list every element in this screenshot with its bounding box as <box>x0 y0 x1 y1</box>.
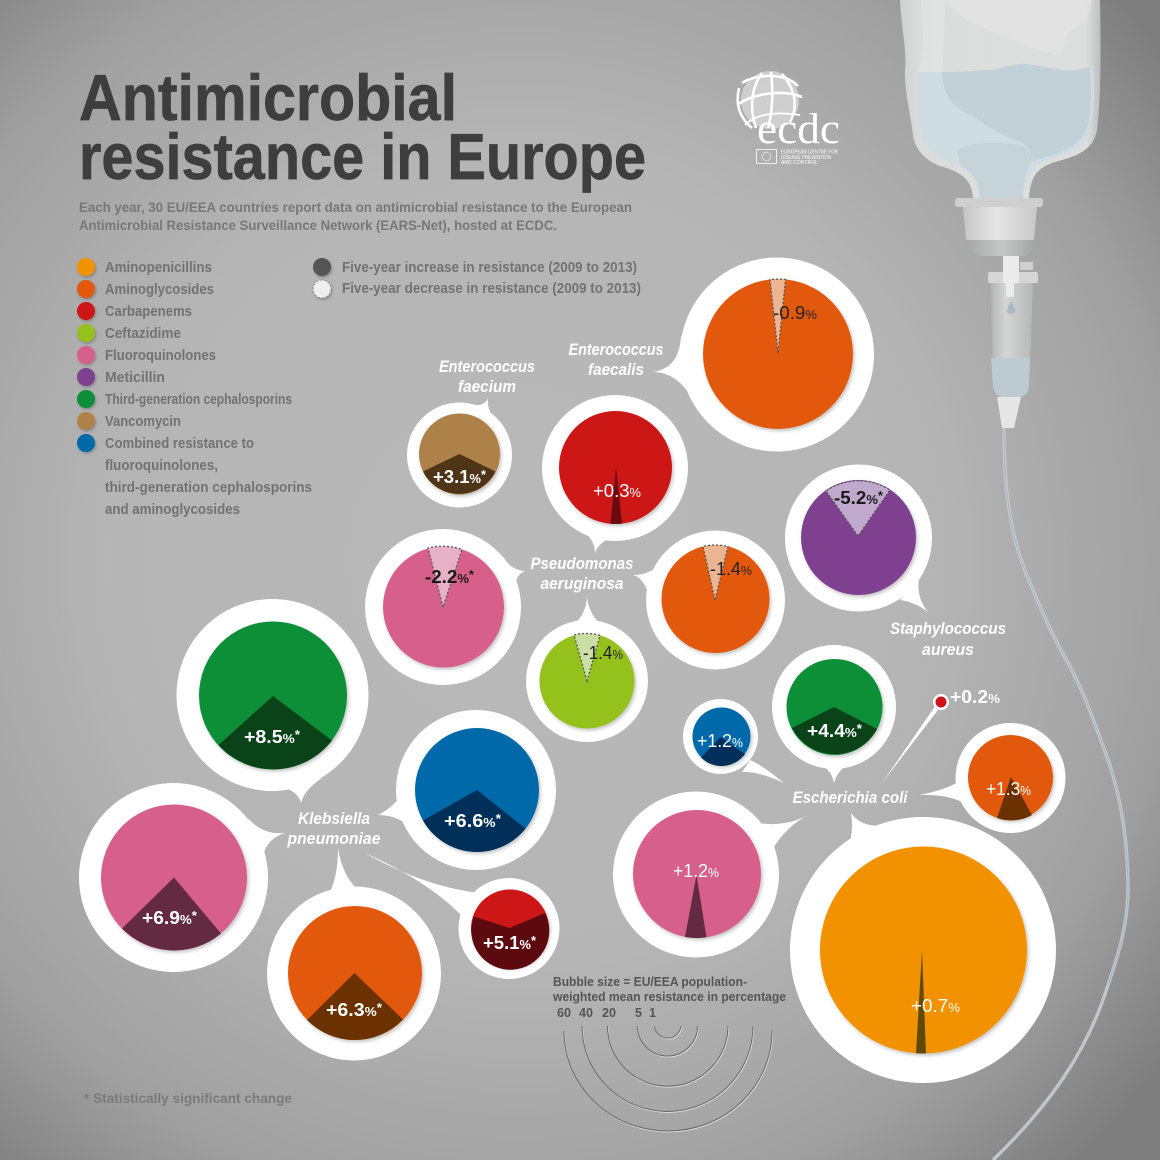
fluid neck shade <box>957 143 1032 198</box>
bubble aminopenicillins: +0.7% <box>911 996 960 1016</box>
title: resistance in Europe <box>79 120 646 193</box>
icon: EU flag <box>756 150 776 164</box>
panel: Klebsiella pneumoniae <box>79 599 560 1060</box>
bubble carbapenems small <box>882 687 1000 783</box>
decrease label: Five-year decrease in resistance (2009 to 2013) <box>342 281 641 297</box>
drip chamber <box>988 256 1038 428</box>
bubble carbapenems: +0.3% <box>593 481 641 501</box>
bubble third-generation cephalosporins: * <box>857 722 862 736</box>
legend labels: Carbapenems <box>105 304 192 320</box>
legend labels: Aminopenicillins <box>105 260 212 276</box>
title: Antimicrobial <box>79 61 457 134</box>
panel: Enterococcus faecium <box>407 358 535 508</box>
bubble carbapenems small: +0.2% <box>950 687 1000 707</box>
bag upper highlight <box>918 0 1092 72</box>
bubble fluoroquinolones <box>613 792 806 958</box>
species label: aeruginosa <box>540 575 624 593</box>
legend: bubble size <box>552 975 786 1132</box>
bubble aminoglycosides: -0.9% <box>773 303 817 323</box>
bubble meticillin <box>785 464 932 612</box>
species label: faecalis <box>588 361 644 379</box>
bubble vancomycin: * <box>481 468 486 482</box>
bubble aminoglycosides: -1.4% <box>710 559 752 579</box>
bubble fluoroquinolones: -2.2% <box>425 567 468 587</box>
bubble carbapenems <box>365 853 560 979</box>
fluid shaded area <box>942 64 1091 162</box>
bubble aminoglycosides <box>919 723 1066 833</box>
bubble fluoroquinolones: * <box>469 568 474 582</box>
icon: increase swatch <box>313 258 331 276</box>
panel: Escherichia coli <box>613 645 1066 1083</box>
bubble vancomycin <box>407 398 512 508</box>
bubble combined resistance: * <box>496 812 501 826</box>
bubble combined resistance: +6.6 % <box>444 811 494 831</box>
species label: faecium <box>458 378 516 396</box>
intro text: Each year, 30 EU/EEA countries report data on antimicrobial resistance to the European <box>79 199 632 215</box>
bubble size numbers: 40 <box>579 1006 593 1020</box>
legend labels: fluoroquinolones, <box>105 458 218 474</box>
intro text <box>79 199 632 233</box>
bubble size numbers: 1 <box>649 1006 656 1020</box>
legend labels: Combined resistance to <box>105 436 254 452</box>
legend labels <box>105 260 312 518</box>
intro text: Antimicrobial Resistance Surveillance Network (EARS-Net), hosted at ECDC. <box>79 217 557 233</box>
bubble ceftazidime: -1.4% <box>583 643 623 663</box>
bubble ceftazidime <box>526 597 648 742</box>
increase label: Five-year increase in resistance (2009 to 2013) <box>342 260 637 276</box>
bubble combined resistance: +1.2% <box>697 731 743 751</box>
title <box>79 61 646 193</box>
legend labels: Aminoglycosides <box>105 282 214 298</box>
bubble combined resistance <box>378 710 556 870</box>
logo caption: AND CONTROL <box>781 160 818 166</box>
IV bag <box>900 0 1101 198</box>
bubble aminopenicillins <box>790 813 1056 1083</box>
bubble fluoroquinolones: +1.2% <box>673 861 719 881</box>
bubble size numbers: 20 <box>602 1006 616 1020</box>
species label: Enterococcus <box>568 341 664 359</box>
bubble aminoglycosides <box>633 530 785 670</box>
bubble aminoglycosides <box>653 258 874 452</box>
panel: Pseudomonas aeruginosa <box>365 395 785 742</box>
bubble fluoroquinolones <box>79 783 285 972</box>
legend labels: Meticillin <box>105 370 165 386</box>
bubble size caption <box>552 975 786 1004</box>
legend: direction of change <box>313 258 641 298</box>
footnote: * Statistically significant change <box>84 1090 292 1106</box>
legend labels: Third-generation cephalosporins <box>105 392 292 408</box>
legend labels: and aminoglycosides <box>105 502 240 518</box>
bubble combined resistance <box>683 699 784 783</box>
legend labels: Vancomycin <box>105 414 181 430</box>
species label: pneumoniae <box>287 830 380 848</box>
bubble carbapenems: +5.1% <box>483 933 531 953</box>
legend labels: third-generation cephalosporins <box>105 480 312 496</box>
bubble carbapenems: * <box>531 934 536 948</box>
species label: Klebsiella <box>298 810 370 828</box>
bubble size numbers: 60 <box>557 1006 571 1020</box>
species label: aureus <box>922 641 974 659</box>
legend labels: Fluoroquinolones <box>105 348 216 364</box>
IV tube <box>993 428 1128 1160</box>
bubble fluoroquinolones <box>365 529 525 685</box>
bubble carbapenems <box>542 395 688 553</box>
bubble meticillin: * <box>878 489 883 503</box>
bubble fluoroquinolones: * <box>192 909 197 923</box>
bubble third-generation cephalosporins <box>772 645 896 783</box>
bag cap <box>955 198 1043 256</box>
bubble aminoglycosides <box>267 848 441 1060</box>
bubble vancomycin: +3.1% <box>433 467 481 487</box>
icon: decrease swatch <box>313 280 331 298</box>
bubble third-generation cephalosporins <box>176 599 368 803</box>
bubble third-generation cephalosporins: +4.4% <box>807 721 856 741</box>
legend: antibiotics <box>77 258 312 518</box>
bubble size numbers <box>557 1006 656 1020</box>
bubble meticillin: -5.2% <box>834 488 877 508</box>
legend swatches <box>77 258 95 452</box>
bubble third-generation cephalosporins: * <box>295 728 300 742</box>
logo caption <box>781 150 838 166</box>
icon: globe <box>737 71 802 129</box>
bubble size numbers: 5 <box>635 1006 642 1020</box>
bubble aminoglycosides: * <box>377 1001 382 1015</box>
bag fluid <box>918 64 1094 198</box>
species label: Pseudomonas <box>530 555 634 573</box>
panel: Staphylococcus aureus <box>785 464 1006 659</box>
bubble aminoglycosides: +6.3% <box>326 1000 376 1020</box>
bubble third-generation cephalosporins: +8.5% <box>244 727 294 747</box>
legend labels: Ceftazidime <box>105 326 181 342</box>
bubble aminoglycosides: +1.3% <box>986 779 1031 799</box>
bubble size caption: weighted mean resistance in percentage <box>552 990 786 1004</box>
icon: ECDC logo <box>737 71 840 166</box>
icon: IV bag and drip chamber <box>900 0 1128 1160</box>
panel: Enterococcus faecalis <box>568 258 874 452</box>
species label: Enterococcus <box>439 358 535 376</box>
bubble size arcs <box>564 1026 773 1132</box>
bubble size caption: Bubble size = EU/EEA population- <box>553 975 747 989</box>
logo wordmark: ecdc <box>757 106 840 153</box>
species label: Staphylococcus <box>890 620 1006 638</box>
logo caption: DISEASE PREVENTION <box>781 155 831 161</box>
logo caption: EUROPEAN CENTRE FOR <box>781 150 838 156</box>
species label: Escherichia coli <box>792 789 908 807</box>
bubble fluoroquinolones: +6.9% <box>142 908 191 928</box>
